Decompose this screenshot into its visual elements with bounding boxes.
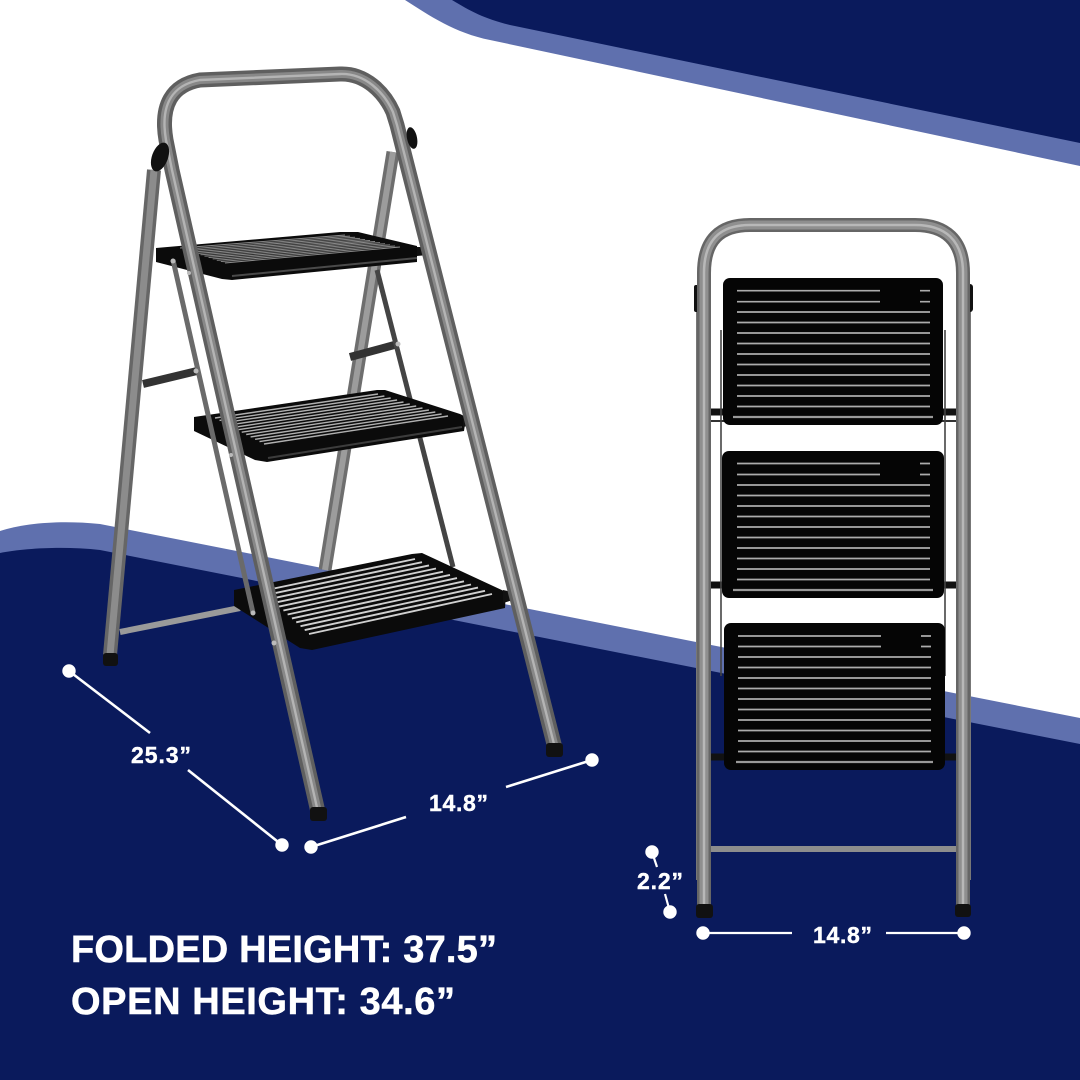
folded ladder, front view [694,225,973,918]
back legs [110,152,393,655]
step 3 [234,553,513,650]
dimension: 25.3 depth [62,664,289,852]
step 2 [194,390,472,462]
top right banner [405,0,1080,166]
cross bars [709,412,958,757]
heights text [71,929,497,1023]
bottom bar [711,846,958,852]
heights text: OPEN HEIGHT: 34.6” [71,981,455,1023]
dimension: 2.2 foot height: 2.2” [637,868,683,894]
left link [173,260,253,613]
dimension: 25.3 depth: 25.3” [131,742,191,768]
dimension: 14.8 side width [304,753,599,854]
dimension: 14.8 front width: 14.8” [813,922,872,948]
frame [704,225,963,905]
heights text: FOLDED HEIGHT: 37.5” [71,929,497,971]
step 1 [156,232,428,280]
feet [696,904,971,918]
braces and right link [120,270,453,632]
open ladder, side view [103,74,563,821]
dimension: 14.8 front width [696,922,971,948]
dimension: 2.2 foot height [637,845,683,919]
step panels [722,278,945,770]
rivets [170,258,400,646]
bottom navy background [0,522,1080,1080]
feet and hinges [103,126,563,821]
front frame with top rail [164,74,555,812]
dimension: 14.8 side width: 14.8” [429,790,488,816]
outer side bars [694,284,973,880]
thin links [721,330,945,676]
